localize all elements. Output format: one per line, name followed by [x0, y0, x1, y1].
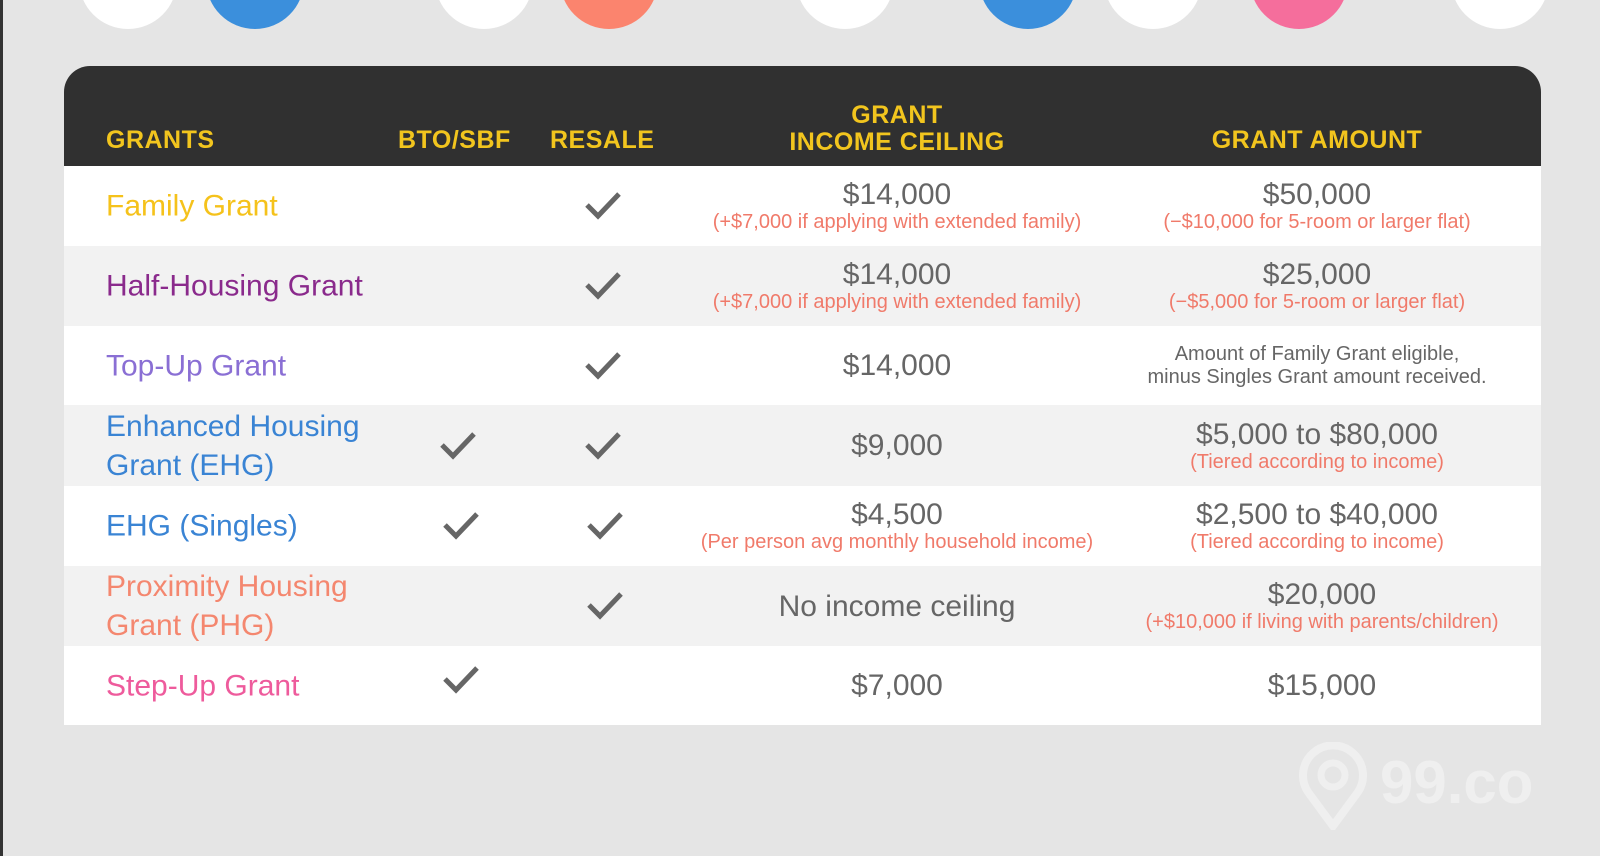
row: Top-Up Grant: $14,000 — [843, 349, 951, 382]
row: Family Grant — [64, 166, 1541, 246]
row: EHG: Grant (EHG) — [106, 448, 274, 482]
watermark logo 99.co: 99.co — [1380, 749, 1533, 816]
row: PHG: Grant (PHG) — [106, 609, 274, 642]
row: EHG: $5,000 to $80,000 — [1196, 418, 1438, 450]
row: EHG: Enhanced Housing — [106, 410, 360, 442]
row: Half-Housing Grant: $25,000 — [1263, 258, 1371, 291]
table header: BTO/SBF — [398, 126, 511, 154]
row: Family Grant: $50,000 — [1263, 178, 1371, 211]
row: EHG: (Tiered according to income) — [1190, 450, 1444, 472]
left border line — [0, 0, 3, 856]
row: PHG: $20,000 — [1268, 578, 1376, 611]
row: EHG Singles: $2,500 to $40,000 — [1196, 498, 1438, 531]
row: Top-Up Grant: Amount of Family Grant eligible, — [1175, 342, 1459, 364]
row: Top-Up Grant — [64, 326, 1541, 405]
row: Family Grant: (+$7,000 if applying with extended family) — [713, 211, 1081, 233]
row: Step-Up Grant: $7,000 — [851, 669, 943, 702]
table header: GRANT AMOUNT — [1212, 126, 1422, 154]
row: EHG: $9,000 — [851, 429, 943, 462]
row: Step-Up Grant — [64, 646, 1541, 725]
row: PHG: (+$10,000 if living with parents/children) — [1146, 611, 1498, 633]
row: Half-Housing Grant: (+$7,000 if applying with extended family) — [713, 291, 1081, 313]
table header — [64, 66, 1541, 166]
table header: RESALE — [550, 126, 654, 154]
row: Family Grant: $14,000 — [843, 178, 951, 211]
row: EHG — [64, 405, 1541, 486]
row: EHG Singles — [64, 486, 1541, 566]
row: Family Grant: (−$10,000 for 5-room or larger flat) — [1163, 211, 1471, 233]
row: PHG: No income ceiling — [779, 590, 1015, 622]
table header: GRANTS — [106, 126, 215, 154]
table header: GRANT — [851, 101, 943, 129]
row: Half-Housing Grant: $14,000 — [843, 258, 951, 291]
row: EHG Singles: (Tiered according to income) — [1190, 531, 1444, 553]
row: Top-Up Grant: minus Singles Grant amount received. — [1147, 366, 1487, 388]
row: PHG: Proximity Housing — [106, 570, 348, 603]
row: Top-Up Grant: Top-Up Grant — [106, 349, 286, 382]
row: PHG — [64, 566, 1541, 646]
row: Half-Housing Grant: (−$5,000 for 5-room or larger flat) — [1169, 291, 1465, 313]
watermark logo 99.co — [1299, 742, 1533, 830]
decorative circles row — [84, 0, 1544, 29]
row: Half-Housing Grant: Half-Housing Grant — [106, 270, 363, 302]
row: EHG Singles: (Per person avg monthly household income) — [701, 531, 1093, 553]
row: Step-Up Grant: $15,000 — [1268, 669, 1376, 702]
table header: INCOME CEILING — [789, 128, 1005, 156]
row: Half-Housing Grant — [64, 246, 1541, 326]
row: EHG Singles: $4,500 — [851, 498, 943, 531]
row: EHG Singles: EHG (Singles) — [106, 510, 298, 542]
row: Step-Up Grant: Step-Up Grant — [106, 669, 299, 702]
row: Family Grant: Family Grant — [106, 190, 278, 222]
